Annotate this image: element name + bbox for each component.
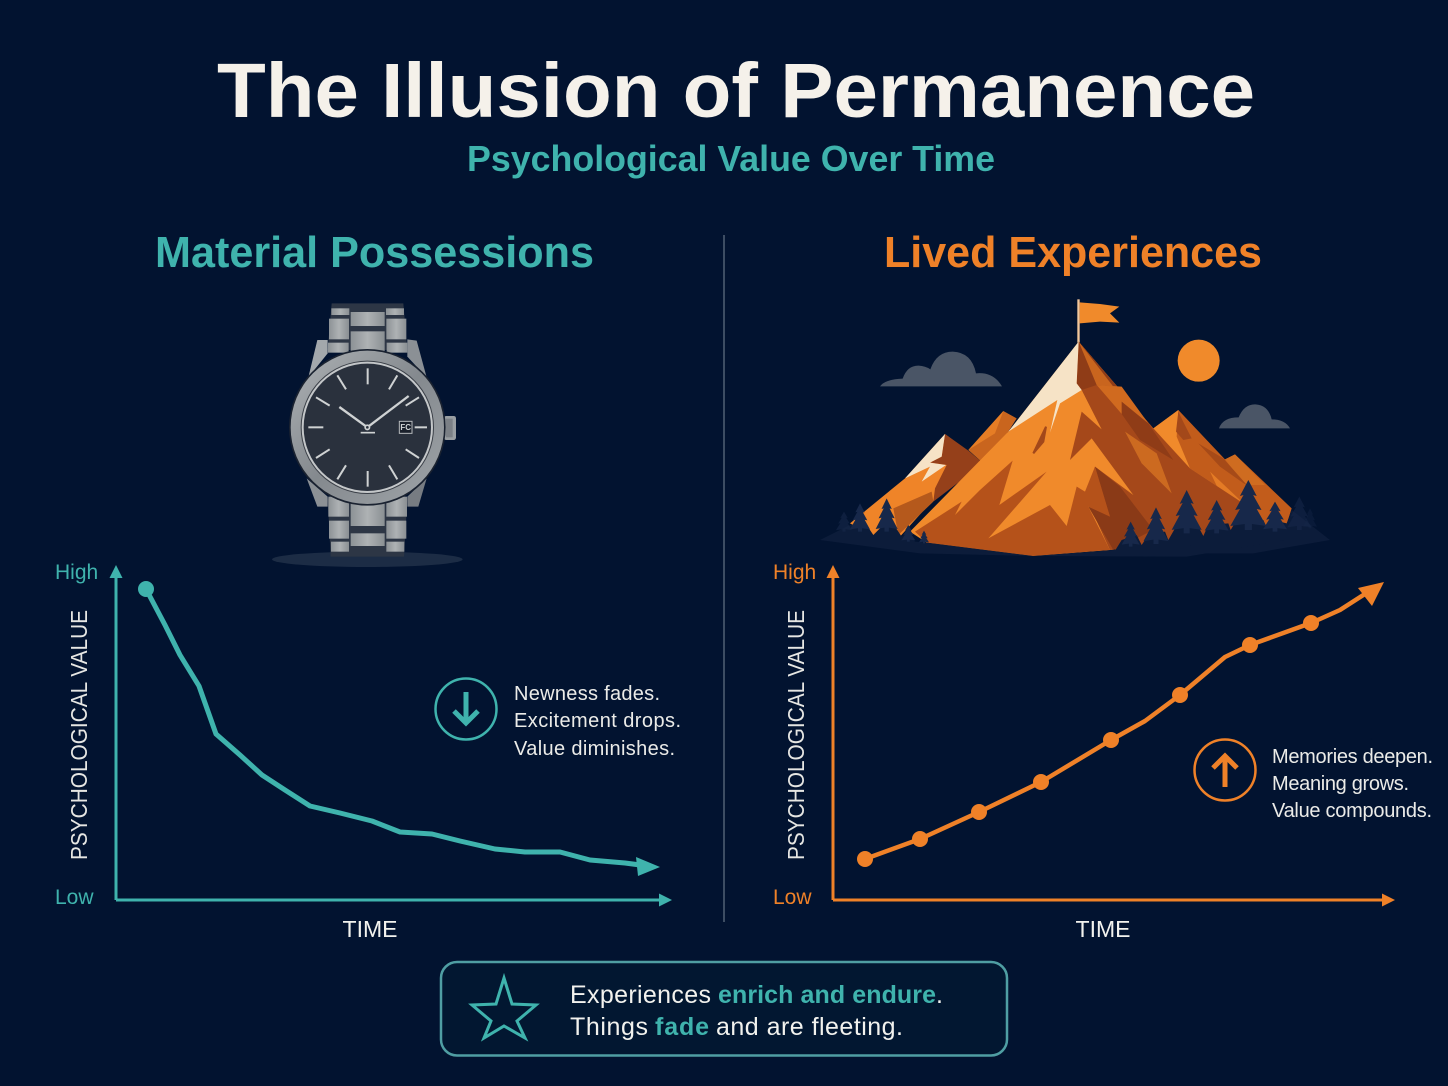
icon: mountain with flag, sun and clouds — [820, 299, 1330, 557]
callout: memories deepen: Value compounds. — [1272, 800, 1432, 822]
subtitle: Psychological Value Over Time — [467, 138, 995, 179]
chart: lived experiences value growth — [773, 561, 1395, 942]
forest ground — [1113, 510, 1330, 553]
rising line — [857, 582, 1384, 867]
icon: clouds — [880, 352, 1290, 428]
axis labels: PSYCHOLOGICAL VALUE — [783, 610, 809, 860]
callout: memories deepen: Memories deepen. — [1272, 746, 1433, 768]
takeaway text: and are fleeting. — [716, 1013, 903, 1041]
takeaway text: fade — [655, 1013, 709, 1041]
main peak — [910, 342, 1260, 556]
takeaway box — [441, 962, 1007, 1056]
callout: newness fades: Newness fades. — [514, 683, 660, 705]
axis labels: TIME — [343, 916, 397, 942]
trees — [836, 480, 1317, 547]
axis labels: High — [55, 561, 98, 584]
icon: up arrow — [1194, 740, 1256, 800]
y axis and x axis — [833, 570, 1385, 900]
right peaks — [1153, 410, 1292, 530]
axis labels: TIME — [1076, 916, 1130, 942]
heading: material possessions: Material Possessions — [155, 228, 594, 277]
back peak — [968, 411, 1017, 463]
icon: down arrow — [436, 678, 496, 740]
callout: newness fades: Value diminishes. — [514, 738, 675, 760]
axis labels — [773, 561, 1130, 942]
callout: memories deepen: Meaning grows. — [1272, 773, 1409, 795]
declining line — [138, 581, 660, 876]
left small peak — [850, 434, 983, 537]
takeaway text: . — [936, 981, 943, 1009]
icon: sun — [1178, 340, 1220, 382]
axis labels: High — [773, 561, 816, 584]
chart: material possessions value decline — [55, 561, 672, 942]
icon: wristwatch — [272, 303, 463, 567]
callout: memories deepen — [1194, 740, 1438, 822]
axis labels: PSYCHOLOGICAL VALUE — [66, 610, 92, 860]
callout: newness fades — [436, 678, 687, 760]
icon: flag — [1077, 299, 1119, 343]
icon: star — [472, 978, 536, 1038]
callout: newness fades: Excitement drops. — [514, 710, 681, 732]
y axis and x axis — [116, 570, 662, 900]
heading: lived experiences: Lived Experiences — [884, 228, 1262, 277]
axis labels: Low — [773, 886, 812, 909]
takeaway text: Things — [570, 1013, 648, 1041]
icon: wristwatch: FC — [400, 423, 411, 432]
axis labels: Low — [55, 886, 94, 909]
title: The Illusion of Permanence — [217, 48, 1255, 134]
axis labels — [55, 561, 397, 942]
takeaway text: Experiences — [570, 981, 711, 1009]
takeaway text: enrich and endure — [718, 981, 936, 1009]
